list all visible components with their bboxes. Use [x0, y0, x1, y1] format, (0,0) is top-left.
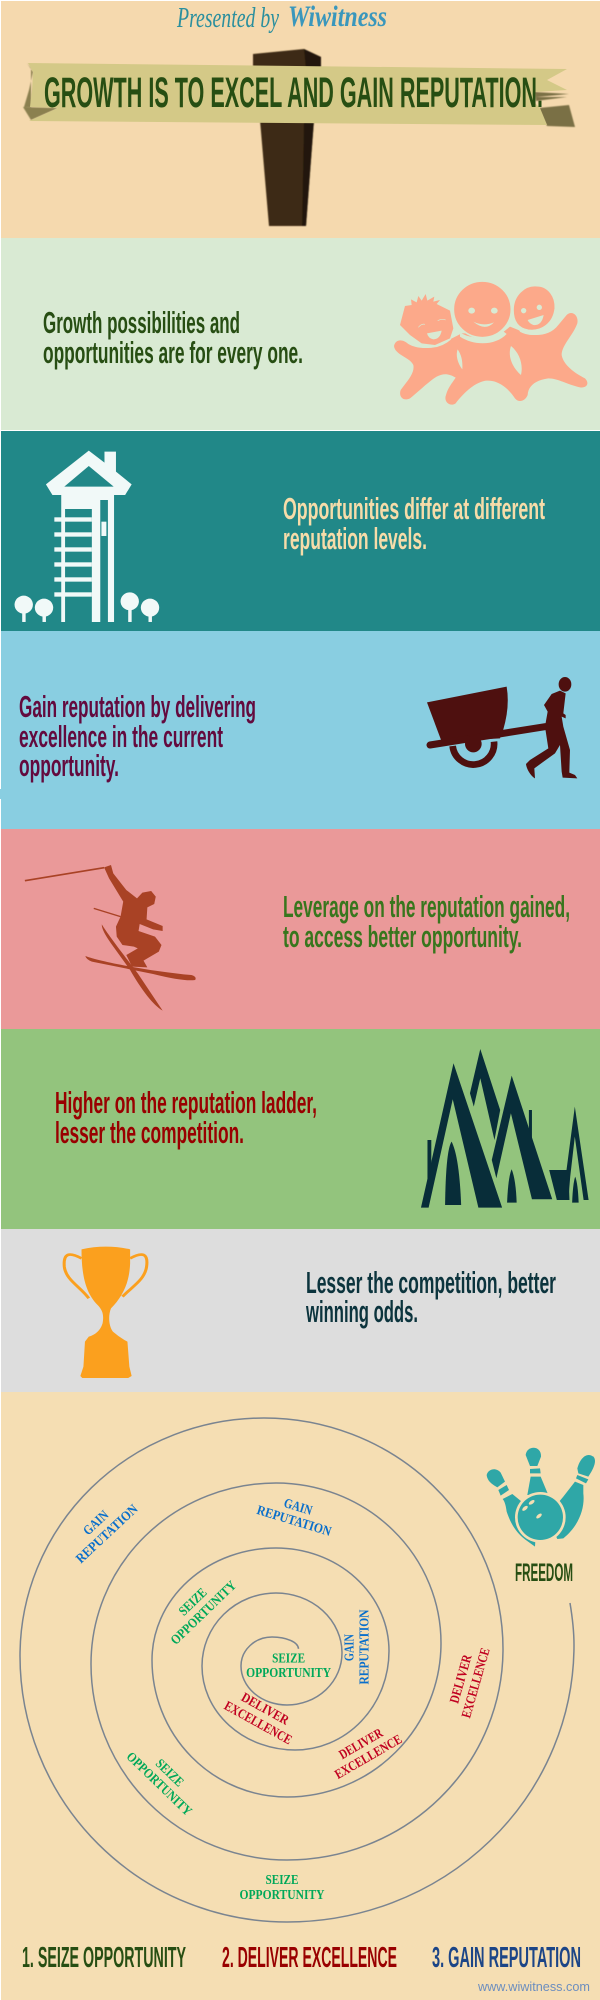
- legend: steps: [22, 1942, 581, 1974]
- text: leverage: [283, 889, 570, 954]
- text: growth possibilities: [43, 305, 303, 370]
- text: higher on the ladder: lesser the competition.: [55, 1115, 244, 1150]
- panel: header: [1, 0, 600, 238]
- label: deliver excellence inner: [222, 1689, 295, 1747]
- text: growth possibilities: Growth possibilities and: [43, 305, 240, 340]
- text: gain reputation: Gain reputation by delivering: [19, 689, 256, 724]
- text: higher on the ladder: Higher on the reputation ladder,: [55, 1085, 317, 1120]
- label: gain reputation outer: REPUTATION: [73, 1501, 141, 1566]
- label: deliver excellence inner: EXCELLENCE: [222, 1698, 295, 1747]
- label: deliver excellence third: [446, 1646, 493, 1720]
- panel: better winning odds: [1, 1229, 600, 1392]
- label: deliver excellence second: EXCELLENCE: [332, 1731, 404, 1782]
- panel: higher on the ladder: [1, 1029, 600, 1229]
- label: seize opportunity bottom: OPPORTUNITY: [240, 1887, 325, 1902]
- label: deliver excellence third: DELIVER: [446, 1653, 475, 1705]
- label: gain reputation inner: [341, 1609, 372, 1684]
- text: better winning odds: winning odds.: [305, 1294, 418, 1329]
- icon: trophy: [64, 1247, 147, 1378]
- label: seize opportunity center: SEIZE: [272, 1650, 305, 1666]
- legend: steps: 1. SEIZE OPPORTUNITY: [22, 1942, 186, 1974]
- text: higher on the ladder: [55, 1085, 317, 1150]
- text: opportunities differ: [283, 491, 545, 556]
- panel: growth possibilities: [1, 238, 600, 430]
- icon: jumping skier: [25, 865, 196, 1011]
- presented by credit: Wiwitness: [288, 0, 387, 33]
- panel: leverage: [1, 829, 600, 1029]
- icon: signpost: [23, 49, 575, 226]
- label: seize opportunity center: OPPORTUNITY: [246, 1665, 331, 1680]
- icon: bowling ball and pins: [487, 1448, 595, 1547]
- panel: gain reputation: [0, 631, 600, 829]
- text: better winning odds: [305, 1265, 556, 1329]
- icon: tall house with ladder and trees: [15, 451, 159, 622]
- label: seize opportunity second: SEIZE: [176, 1585, 210, 1618]
- icon: mountains: [421, 1049, 589, 1208]
- label: gain reputation inner: GAIN: [341, 1634, 356, 1661]
- icon: three smiling children: [394, 281, 587, 405]
- label: seize opportunity lower left: OPPORTUNITY: [124, 1749, 195, 1819]
- text: gain reputation: excellence in the current: [19, 719, 223, 754]
- spiral line: [20, 1418, 574, 1922]
- panel: opportunities differ: [1, 431, 600, 631]
- text: growth possibilities: opportunities are for every one.: [43, 335, 303, 370]
- presented by credit: Presented by: [176, 2, 279, 34]
- text: gain reputation: opportunity.: [19, 748, 119, 783]
- text: gain reputation: [19, 689, 256, 783]
- label: seize opportunity lower left: SEIZE: [153, 1756, 187, 1789]
- legend: steps: 2. DELIVER EXCELLENCE: [222, 1942, 397, 1974]
- label: gain reputation top: GAIN: [282, 1495, 314, 1518]
- label: deliver excellence inner: DELIVER: [239, 1689, 292, 1728]
- label: seize opportunity second: OPPORTUNITY: [167, 1578, 239, 1648]
- icon: person pulling wheelbarrow: [427, 677, 577, 778]
- label: gain reputation inner: REPUTATION: [357, 1609, 372, 1684]
- label: seize opportunity bottom: SEIZE: [266, 1872, 298, 1887]
- banner board: [28, 63, 567, 125]
- text: opportunities differ: reputation levels.: [283, 521, 427, 556]
- website url: www.wiwitness.com: [477, 1979, 590, 1994]
- label: deliver excellence second: DELIVER: [336, 1725, 385, 1762]
- label: seize opportunity center: [246, 1650, 331, 1680]
- panel: reputation spiral: [1, 1392, 600, 2000]
- label: deliver excellence third: EXCELLENCE: [458, 1646, 493, 1720]
- presented by credit: [176, 0, 387, 34]
- label: gain reputation outer: GAIN: [80, 1507, 112, 1538]
- label: seize opportunity bottom: [240, 1872, 325, 1902]
- label: gain reputation top: REPUTATION: [255, 1502, 333, 1539]
